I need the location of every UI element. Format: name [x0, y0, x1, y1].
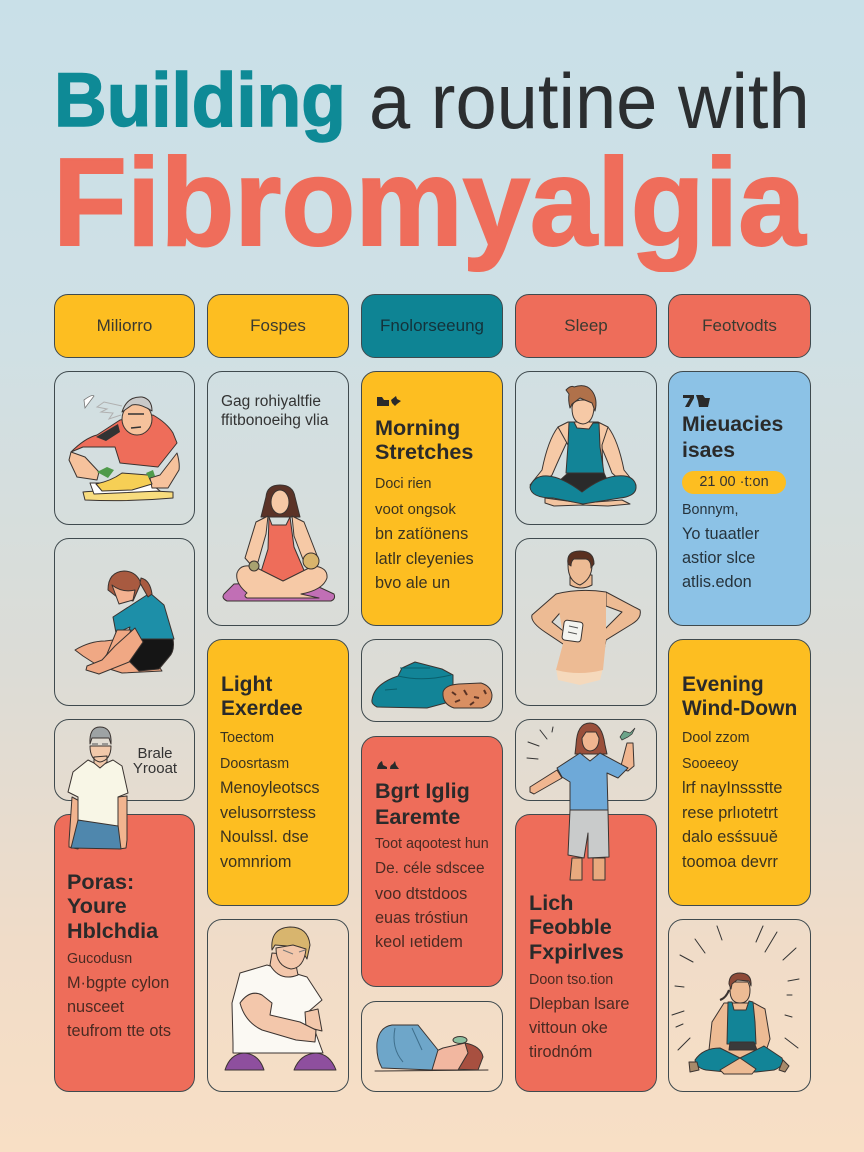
heading: Lich	[529, 890, 573, 914]
body text: lrf nayInssstte	[682, 779, 782, 797]
body text: Dool zzom	[682, 730, 750, 746]
panel: yellow card Evening Wind-Down	[668, 639, 811, 906]
body text	[529, 972, 629, 1061]
panel: blue card Mieuacies isaes	[668, 371, 811, 626]
panel caption: Gag rohiyaltfie	[221, 393, 321, 410]
panel: lying down illustration	[361, 1001, 503, 1092]
header tab: Fnolorseeung: Fnolorseeung	[380, 316, 484, 335]
body text: De. céle sdscee	[375, 860, 485, 877]
title words: a routine with: a routine with	[368, 57, 809, 145]
heading: Youre	[67, 893, 127, 918]
heading: Hblchdia	[67, 918, 158, 942]
heading: Bgrt Iglig	[375, 778, 470, 803]
heading	[529, 890, 624, 964]
panel: yellow card Morning Stretches	[361, 371, 503, 626]
body text: Yo tuaatler	[682, 525, 759, 543]
heading: Wind-Down	[682, 697, 797, 720]
heading: Stretches	[375, 439, 473, 464]
header tab: Fospes	[207, 294, 349, 358]
heading: Feobble	[529, 914, 612, 939]
body text: Toectom	[220, 730, 274, 746]
body text: Menoyleotscs	[220, 779, 320, 797]
caption text: Brale	[137, 745, 173, 762]
heading	[67, 868, 158, 942]
panel: teal tank meditation	[515, 371, 657, 525]
illustration: torso with card	[531, 550, 641, 685]
body text: atlis.edon	[682, 573, 752, 591]
panel: hands massage illustration	[207, 919, 349, 1092]
illustration: woman meditating on mat	[222, 484, 336, 602]
body text: vomnriom	[220, 853, 291, 871]
body text	[220, 730, 320, 871]
illustration: seated forward stretch	[74, 570, 174, 674]
caption text: Yrooat	[133, 760, 177, 777]
body text: nusceet	[67, 998, 124, 1016]
panel: calm meditation illustration	[668, 919, 811, 1092]
header tab: Feotvodts	[668, 294, 811, 358]
body text: Doosrtasm	[220, 756, 289, 772]
heading: Evening	[682, 673, 764, 696]
body text	[67, 951, 171, 1040]
illustration: calm meditating figure with rays	[672, 926, 800, 1074]
panel: torso illustration	[515, 538, 657, 706]
header tab: Miliorro: Miliorro	[97, 316, 152, 335]
title	[53, 57, 809, 272]
heading: Earemte	[375, 804, 460, 829]
icon: number glyph	[683, 395, 710, 407]
panel: seated forward stretch illustration	[54, 538, 195, 706]
heading: Morning	[375, 415, 460, 440]
header tab: Fnolorseeung	[361, 294, 503, 358]
body text: rese prlıotetrt	[682, 804, 778, 822]
body text: Noulssl. dse	[220, 828, 309, 846]
heading	[682, 673, 797, 720]
illustration: white-shirt person holding hands	[224, 926, 336, 1070]
header tab: Sleep: Sleep	[564, 316, 608, 335]
time pill: 21 00 ·t:on	[699, 474, 769, 490]
body text: Toot aqootest hun	[375, 836, 489, 852]
body text: latlr cleyenies	[375, 550, 474, 568]
body text: dalo esśsuuě	[682, 828, 778, 846]
body text	[375, 836, 489, 951]
body text: velusorrstess	[220, 804, 316, 822]
time pill	[682, 471, 786, 494]
heading: Mieuacies	[682, 413, 783, 436]
header tab: Sleep	[515, 294, 657, 358]
illustration: teal tank meditation	[530, 385, 637, 506]
body text: astior slce	[682, 549, 755, 567]
body text: Gucodusn	[67, 951, 132, 967]
body text: Sooeeoy	[682, 756, 738, 772]
panel caption: ffitbonoeihg vlia	[221, 412, 328, 429]
heading: Fxpirlves	[529, 938, 624, 964]
header tab: Miliorro	[54, 294, 195, 358]
title word: Fibromyalgia: Fibromyalgia	[53, 134, 805, 272]
heading	[375, 778, 470, 829]
illustration: standing woman in blue shirt	[526, 722, 636, 880]
body text	[375, 476, 474, 592]
title word: Building: Building	[54, 58, 345, 143]
heading: Light	[221, 673, 272, 696]
body text	[682, 502, 760, 591]
heading	[375, 415, 473, 464]
body text: toomoa devrr	[682, 853, 778, 871]
panel: cooking illustration	[54, 371, 195, 525]
illustration: person cooking	[68, 395, 180, 502]
body text: M·bgpte cylon	[67, 974, 169, 992]
heading	[221, 673, 303, 720]
heading	[682, 413, 783, 462]
body text: voot ongsok	[375, 500, 456, 518]
body text: keol ıetidem	[375, 933, 463, 951]
panel: red card Bgrt Iglig	[361, 736, 503, 987]
body text: Bonnym,	[682, 502, 738, 518]
heading: Poras:	[67, 868, 134, 894]
body text: teufrom tte ots	[67, 1022, 171, 1040]
body text: Doci rien	[375, 476, 431, 492]
body text: tirodnóm	[529, 1043, 592, 1061]
illustration: pillow and bread	[371, 662, 492, 708]
panel: yellow card Light Exerdee	[207, 639, 349, 906]
icon: small glyphs	[377, 761, 399, 769]
body text: voo dtstdoos	[375, 885, 467, 903]
panel: meditation on mat	[207, 371, 349, 626]
panel: brale yrooat caption	[54, 719, 195, 801]
body text: vittoun oke	[529, 1019, 608, 1037]
panel: pillow illustration	[361, 639, 503, 722]
body text: euas tróstiun	[375, 909, 468, 927]
body text: Dlepban lsare	[529, 995, 629, 1013]
panel: red card Lich Feobble	[515, 814, 657, 1092]
illustration: lying down person	[374, 1024, 488, 1072]
body text: bvo ale un	[375, 574, 450, 592]
body text	[682, 730, 782, 871]
heading: isaes	[682, 439, 735, 462]
caption text	[133, 745, 177, 777]
header tab: Fospes: Fospes	[250, 316, 306, 335]
panel caption	[221, 393, 328, 429]
body text: Doon tso.tion	[529, 972, 613, 988]
panel: standing woman backdrop	[515, 719, 657, 801]
panel: red card Poras	[54, 814, 195, 1092]
illustration: standing man	[68, 726, 128, 850]
header tab: Feotvodts: Feotvodts	[702, 316, 777, 335]
body text: bn zatíönens	[375, 525, 468, 543]
heading: Exerdee	[221, 697, 303, 720]
icon: morning glyphs	[377, 396, 401, 406]
